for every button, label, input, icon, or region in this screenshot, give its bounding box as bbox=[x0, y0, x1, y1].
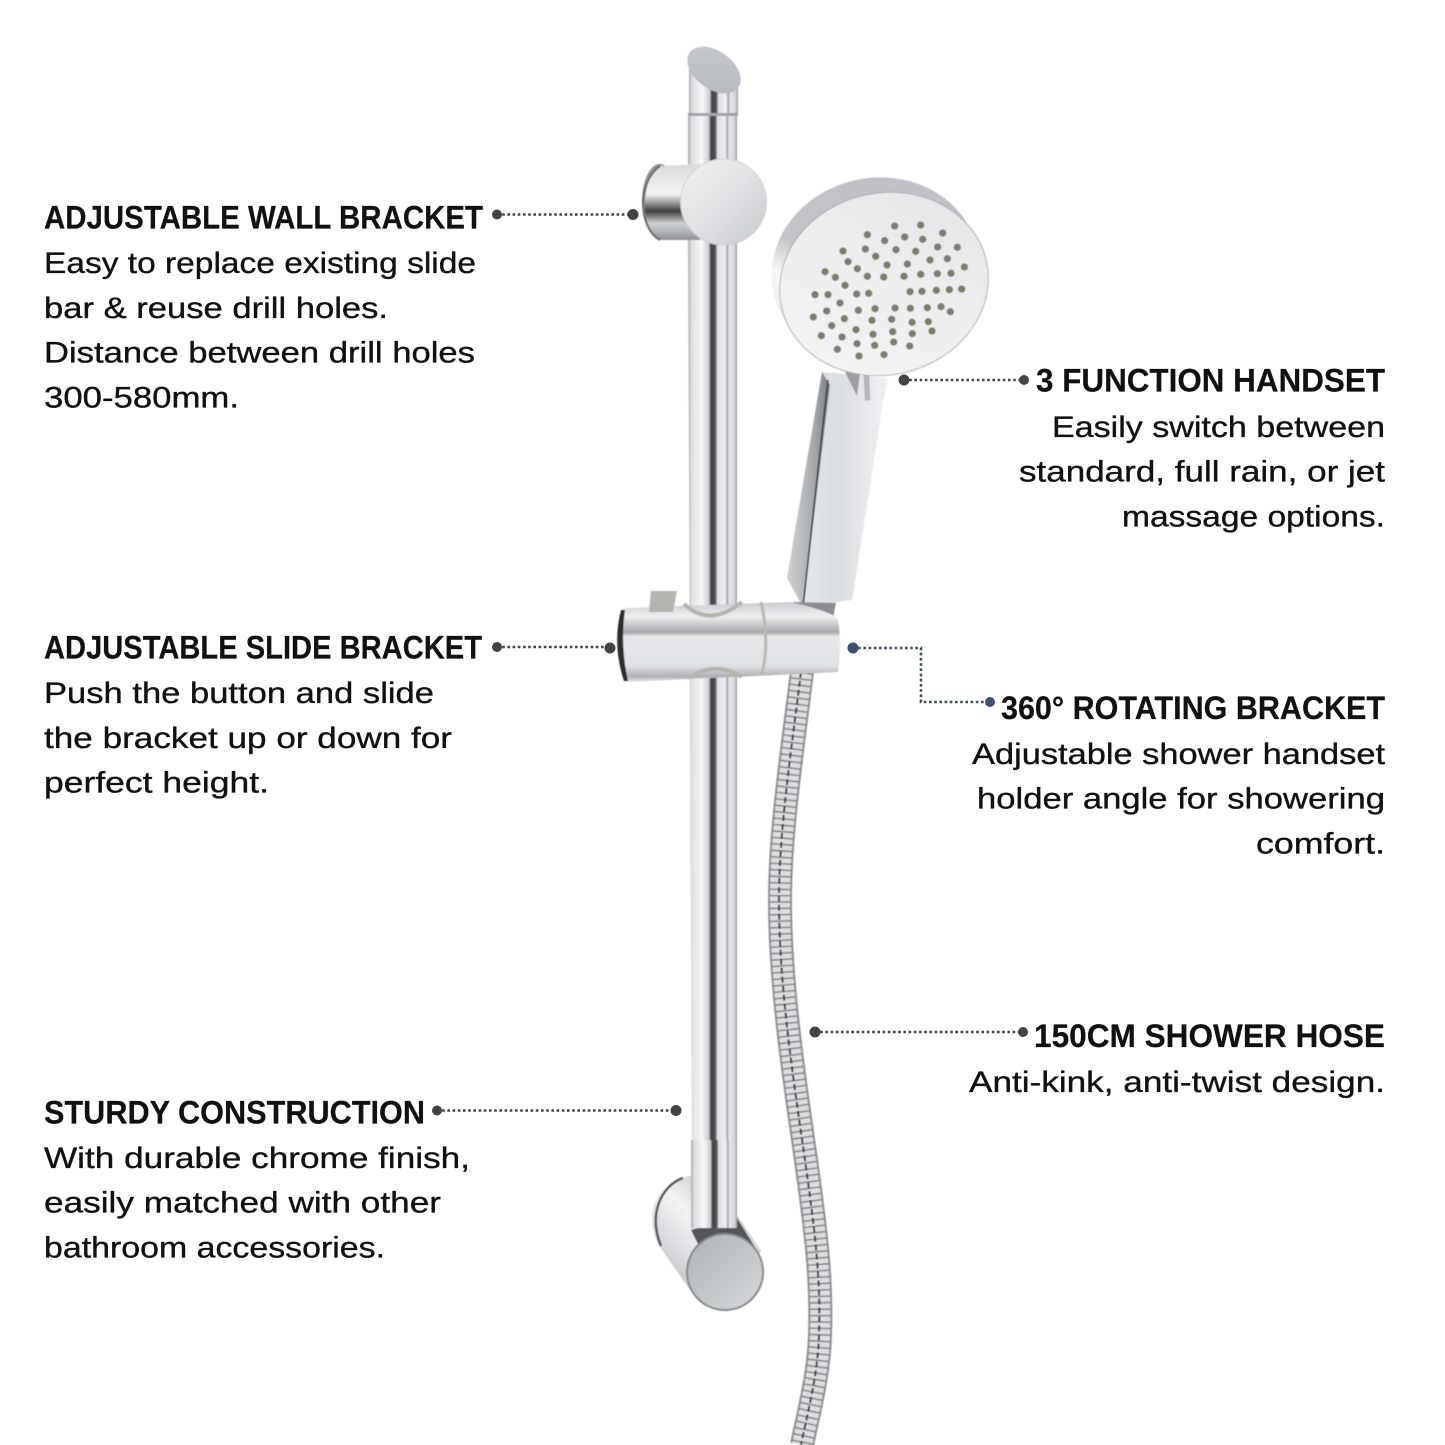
text block: adjustable wall bracket: Easy to replace existing slide bbox=[44, 247, 476, 280]
handset head rim bbox=[753, 157, 997, 383]
text block: adjustable wall bracket: Distance between drill holes bbox=[44, 336, 475, 370]
bottom wall bracket bbox=[652, 1140, 763, 1310]
text block: 360 rotating bracket bbox=[972, 690, 1386, 860]
text block: 3 function handset: massage options. bbox=[1122, 500, 1385, 534]
handset handle bbox=[787, 362, 888, 607]
text block: 360 rotating bracket: holder angle for showering bbox=[977, 782, 1385, 816]
text block: adjustable slide bracket: perfect height. bbox=[44, 766, 269, 800]
text block: adjustable wall bracket: bar & reuse drill holes. bbox=[44, 292, 388, 325]
text block: 360 rotating bracket: comfort. bbox=[1256, 828, 1385, 860]
top bracket cap and rail section bbox=[679, 37, 749, 170]
grey rail clips bbox=[684, 602, 742, 678]
text block: 360 rotating bracket: Adjustable shower handset bbox=[972, 738, 1386, 771]
text block: sturdy construction bbox=[44, 1094, 470, 1264]
spray nozzles bbox=[813, 225, 964, 356]
adjustable wall bracket bbox=[642, 159, 766, 245]
text block: 150cm shower hose: Anti-kink, anti-twist design. bbox=[969, 1066, 1385, 1099]
text block: adjustable wall bracket: 300-580mm. bbox=[44, 382, 239, 414]
handset holder neck bbox=[793, 602, 836, 622]
connector: rotating bracket bbox=[848, 642, 995, 707]
adjustable slide bracket bbox=[617, 591, 840, 682]
connector: hose bbox=[810, 1026, 1028, 1038]
text block: 3 function handset bbox=[1019, 362, 1386, 534]
text block: 360 rotating bracket: 360° ROTATING BRACKET bbox=[1001, 690, 1385, 726]
handset head face bbox=[761, 172, 1007, 396]
connector: wall bracket bbox=[492, 209, 638, 220]
product: chrome shower slide rail kit bbox=[617, 37, 1007, 1445]
text block: 3 function handset: 3 FUNCTION HANDSET bbox=[1036, 362, 1385, 398]
text block: 3 function handset: standard, full rain, or jet bbox=[1019, 456, 1386, 488]
text block: adjustable slide bracket: ADJUSTABLE SLIDE BRACKET bbox=[44, 630, 482, 666]
text block: 150cm shower hose: 150CM SHOWER HOSE bbox=[1034, 1018, 1385, 1054]
connector: slide bracket bbox=[492, 642, 616, 654]
text block: adjustable wall bracket: ADJUSTABLE WALL BRACKET bbox=[44, 200, 483, 236]
connector: sturdy construction bbox=[432, 1105, 682, 1116]
text block: adjustable slide bracket bbox=[44, 630, 482, 800]
text block: adjustable wall bracket bbox=[44, 200, 483, 414]
text block: adjustable slide bracket: Push the button and slide bbox=[44, 677, 434, 710]
text block: sturdy construction: easily matched with other bbox=[44, 1186, 441, 1220]
connector: handset bbox=[898, 374, 1029, 386]
handset bbox=[753, 157, 1007, 607]
push button bbox=[649, 591, 677, 612]
text block: 150cm shower hose bbox=[969, 1018, 1385, 1099]
rail bbox=[688, 230, 737, 1235]
text block: adjustable slide bracket: the bracket up or down for bbox=[44, 722, 452, 755]
text block: sturdy construction: With durable chrome finish, bbox=[44, 1142, 470, 1175]
text block: 3 function handset: Easily switch between bbox=[1052, 411, 1385, 444]
text block: sturdy construction: STURDY CONSTRUCTION bbox=[44, 1094, 425, 1130]
flexible shower hose bbox=[779, 672, 820, 1445]
text block: sturdy construction: bathroom accessories. bbox=[44, 1232, 385, 1264]
